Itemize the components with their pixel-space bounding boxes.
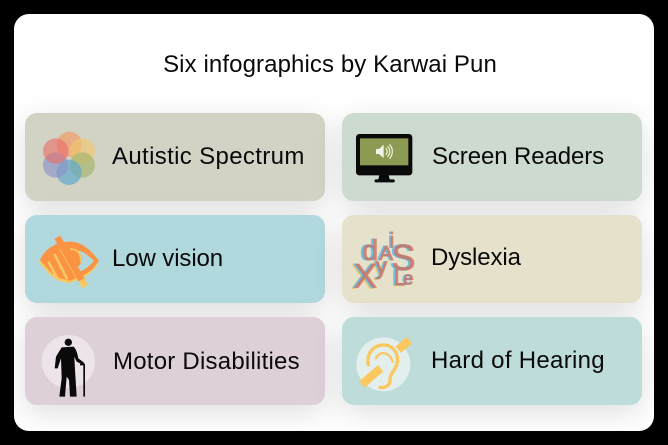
icon: crossed ear <box>356 337 412 392</box>
panel: Hard of Hearing <box>342 317 642 405</box>
red letter layer: y <box>376 253 388 279</box>
red letter layer: d <box>362 235 378 267</box>
icon: person with cane <box>42 335 95 397</box>
yellow letter layer: L <box>392 266 404 291</box>
red letter layer: L <box>394 265 406 290</box>
panel: Autistic Spectrum <box>25 113 325 201</box>
blue letter layer: i <box>388 228 393 252</box>
blue letter layer: e <box>402 269 412 289</box>
blue letter layer: X <box>352 257 375 295</box>
label: Motor Disabilities <box>113 348 300 375</box>
label: Dyslexia <box>431 244 521 271</box>
icon: overlapping coloured circles <box>43 132 95 185</box>
icon: crossed eye <box>39 236 99 288</box>
label: Screen Readers <box>432 143 604 170</box>
blue letter layer: L <box>392 265 404 290</box>
label: Autistic Spectrum <box>112 143 305 170</box>
yellow letter layer: y <box>373 254 385 280</box>
red letter layer: S <box>392 237 416 278</box>
red letter layer: e <box>404 269 414 289</box>
yellow letter layer <box>351 254 404 296</box>
blue letter layer: S <box>389 237 413 278</box>
blue letter layer: y <box>374 253 386 279</box>
red letter layer <box>354 228 416 295</box>
panel: Screen Readers <box>342 113 642 201</box>
blue letter layer <box>352 228 413 295</box>
icon: jumbled letters <box>351 228 416 296</box>
blue letter layer: A <box>377 242 391 265</box>
red letter layer: X <box>354 257 377 295</box>
panel: Dyslexia <box>342 215 642 303</box>
panel: Low vision <box>25 215 325 303</box>
red letter layer: i <box>390 228 394 252</box>
icon: monitor with speaker <box>356 134 412 182</box>
label: Low vision <box>112 245 223 272</box>
yellow letter layer: X <box>351 258 374 296</box>
panel: Motor Disabilities <box>25 317 325 405</box>
label: Hard of Hearing <box>431 347 605 374</box>
red letter layer: A <box>379 242 393 265</box>
title: Six infographics by Karwai Pun <box>163 51 497 78</box>
blue letter layer: d <box>360 235 376 267</box>
